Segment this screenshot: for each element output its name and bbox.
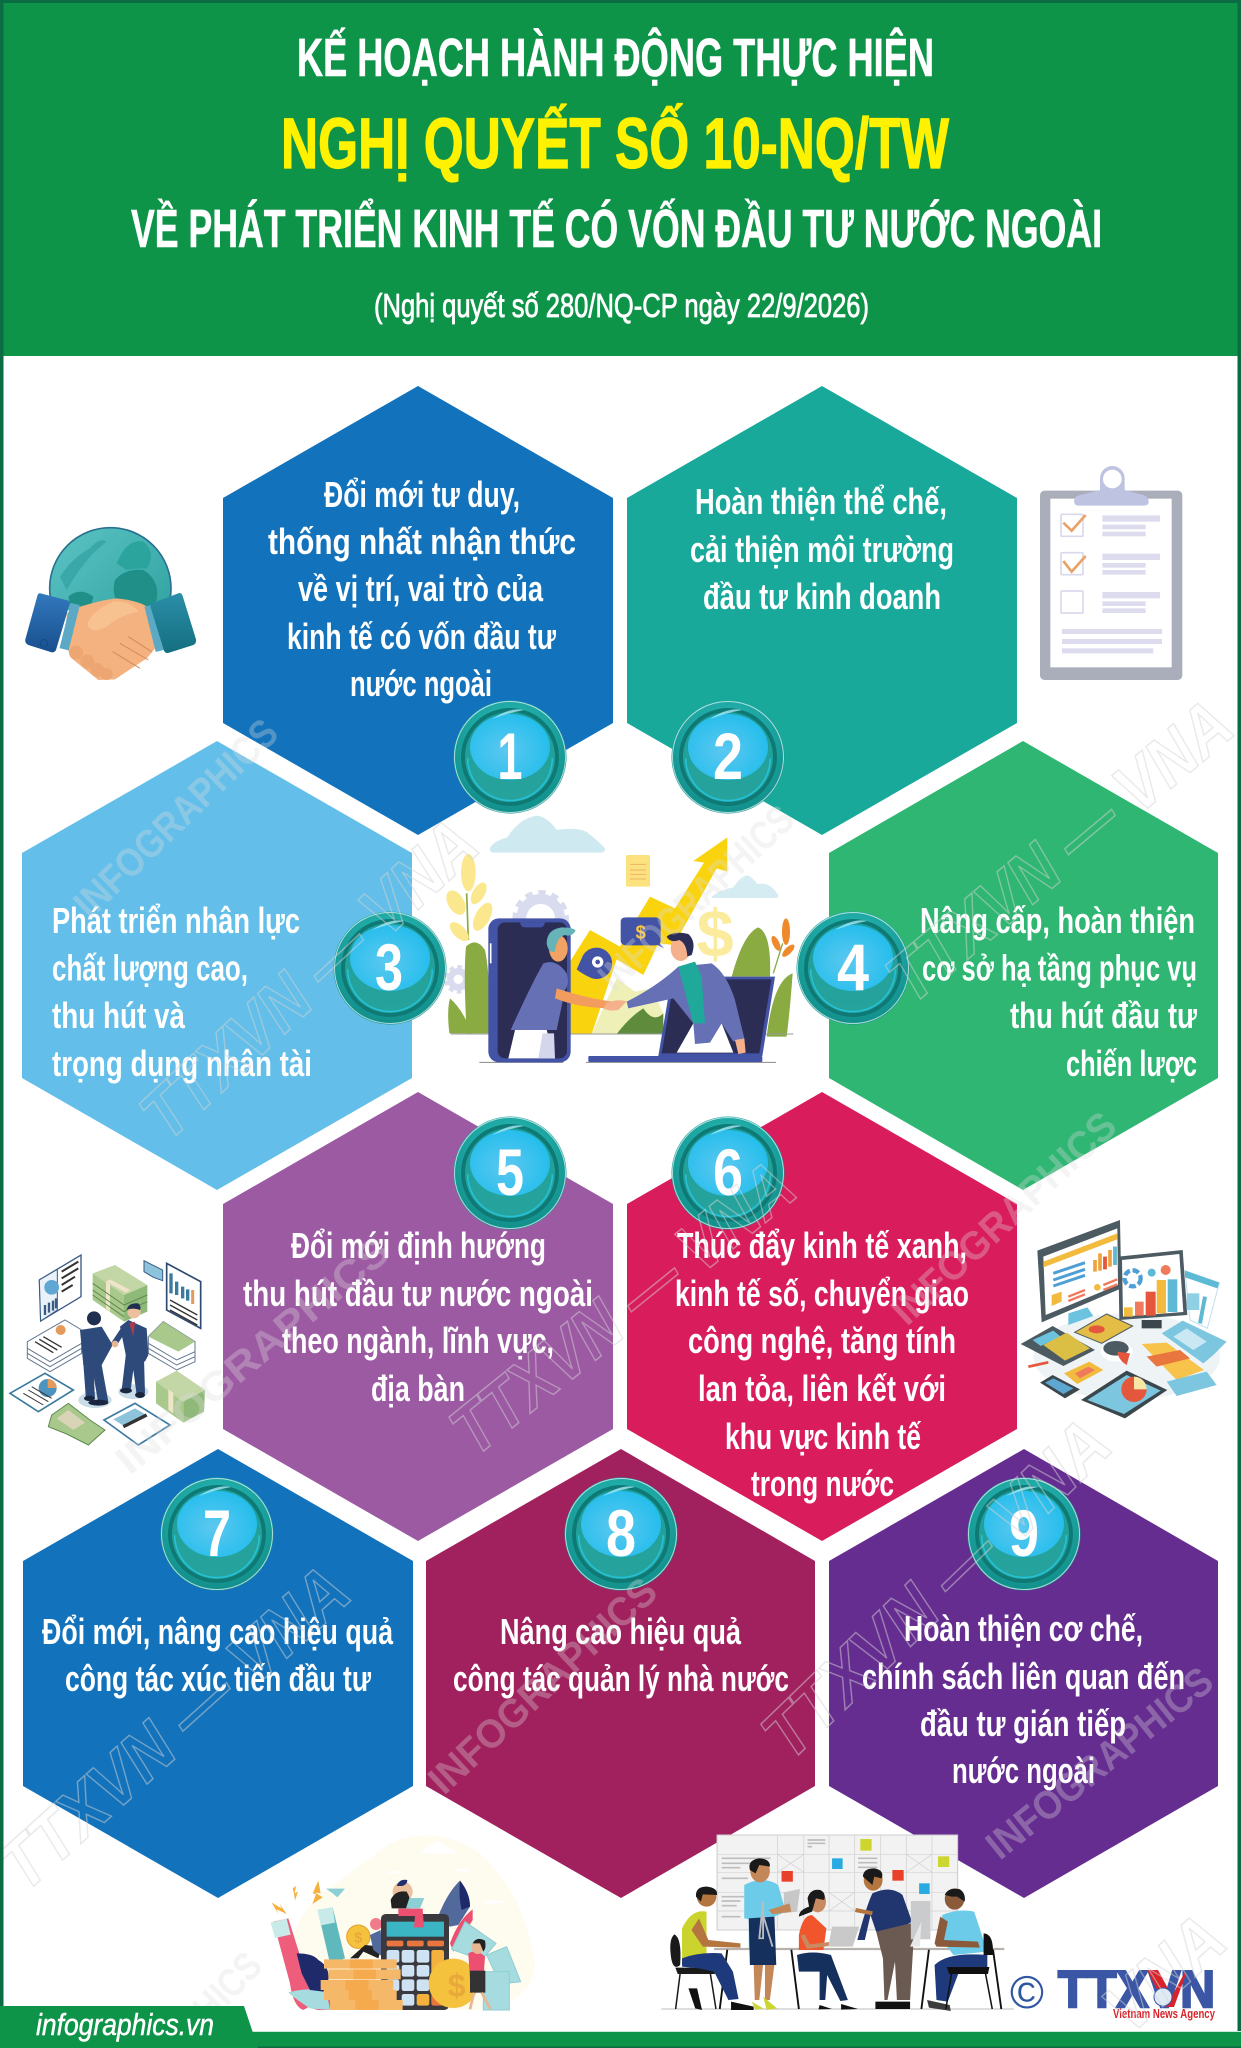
watermarks: INFOGRAPHICS (420, 1569, 666, 1803)
text: item 6: trong nước (751, 1463, 894, 1504)
panel: hexagon 2 (627, 386, 1017, 835)
text: item 5 (243, 1225, 593, 1409)
text: item 6 (675, 1225, 969, 1504)
text: item 9: Hoàn thiện cơ chế, (904, 1608, 1143, 1649)
watermarks: TTXVN — VNA (746, 1404, 1126, 1774)
badge 6 (672, 1116, 784, 1230)
text: item 7: Đổi mới, nâng cao hiệu quả (42, 1611, 394, 1652)
icon: clipboard checklist (1040, 466, 1182, 680)
text: item 8: công tác quản lý nhà nước (453, 1658, 789, 1699)
text: item 2: Hoàn thiện thể chế, (695, 481, 947, 522)
badge 2 (672, 700, 784, 814)
icon: team meeting in front of planning board (661, 1835, 1014, 2011)
text: item 2: cải thiện môi trường (690, 529, 954, 570)
watermarks: INFOGRAPHICS (66, 711, 287, 926)
text: item 3: chất lượng cao, (52, 948, 248, 988)
footer website: infographics.vn (36, 2007, 214, 2042)
text: item 3 (52, 900, 312, 1084)
icon: businessmen with money and reports (10, 1255, 205, 1445)
badge 1: 1 (498, 719, 522, 793)
text: item 1: Đổi mới tư duy, (324, 474, 520, 515)
watermarks (0, 685, 1241, 2047)
panel: hexagon 4 (829, 741, 1218, 1190)
text: item 9: nước ngoài (952, 1750, 1095, 1791)
icon: magnet, calculator and coins finance illustration: $ (354, 1931, 362, 1947)
icon: magnet, calculator and coins finance illustration (271, 1835, 535, 2010)
badge 4 (796, 912, 910, 1024)
icon: dashboards, calculator and documents (1021, 1220, 1227, 1418)
watermarks: INFOGRAPHICS (883, 1104, 1125, 1334)
badge 8: 8 (606, 1496, 636, 1570)
text: item 6: kinh tế số, chuyển giao (675, 1273, 969, 1314)
icon: central illustration, handshake through phone and laptop: $ (697, 898, 734, 972)
text: item 5: theo ngành, lĩnh vực, (282, 1320, 554, 1361)
badge 5 (454, 1116, 566, 1230)
badge 3 (334, 912, 446, 1024)
text: item 3: Phát triển nhân lực (52, 900, 300, 941)
panel: hexagon 7 (23, 1449, 413, 1898)
footer band (0, 2006, 1241, 2048)
badge 9 (968, 1478, 1080, 1590)
panel: hexagon 1 (223, 386, 613, 835)
badge 7 (160, 1478, 274, 1590)
badge 6: 6 (713, 1135, 743, 1209)
title line 2: resolution number: NGHỊ QUYẾT SỐ 10-NQ/TW (281, 104, 949, 184)
panel: hexagon 8 (426, 1449, 815, 1898)
icon: central illustration, handshake through phone and laptop: $ (635, 921, 646, 942)
badge 8 (564, 1478, 678, 1590)
watermarks: INFOGRAPHICS (108, 1229, 399, 1483)
text: item 4 (920, 900, 1198, 1084)
subtitle: (Nghị quyết số 280/NQ-CP ngày 22/9/2026) (374, 287, 869, 324)
text: item 7: công tác xúc tiến đầu tư (65, 1658, 372, 1699)
panel: hexagon 3 (22, 741, 412, 1190)
title line 1: KẾ HOẠCH HÀNH ĐỘNG THỰC HIỆN (297, 27, 934, 88)
badge 5: 5 (496, 1135, 524, 1209)
panel: hexagon 6 (627, 1092, 1017, 1541)
watermarks: INFOGRAPHICS (590, 797, 803, 1000)
text: item 3: trọng dụng nhân tài (52, 1043, 312, 1084)
icon: copyright symbol: © (1010, 1966, 1044, 2018)
text: item 1: kinh tế có vốn đầu tư (287, 616, 557, 657)
text: item 7 (42, 1611, 394, 1699)
text: item 5: thu hút đầu tư nước ngoài (243, 1273, 593, 1314)
watermarks: TTXVN — VNA (125, 804, 493, 1154)
logo: TTXVN: TTXVN (1058, 1961, 1215, 2019)
badge 9: 9 (1009, 1496, 1039, 1570)
text: item 6: lan tỏa, liên kết với (698, 1368, 946, 1409)
icon: globe with handshake (25, 528, 196, 680)
text: item 8: Nâng cao hiệu quả (500, 1611, 742, 1652)
text: item 9: đầu tư gián tiếp (920, 1703, 1126, 1744)
footer tab (0, 2006, 258, 2048)
watermarks: PHICS (170, 1944, 271, 2046)
text: item 3: thu hút và (52, 995, 186, 1036)
text: item 6: khu vực kinh tế (725, 1416, 922, 1457)
badge 2: 2 (713, 719, 743, 793)
badge 1 (454, 700, 566, 814)
badge 3: 3 (375, 930, 403, 1004)
text: item 2: đầu tư kinh doanh (703, 576, 941, 617)
watermarks: INFOGRAPHICS (978, 1659, 1222, 1868)
badge 4: 4 (837, 930, 869, 1004)
icon: central illustration, handshake through phone and laptop (442, 816, 796, 1062)
text: item 1: về vị trí, vai trò của (298, 568, 544, 609)
text: item 1: nước ngoài (350, 663, 492, 704)
text: item 8 (453, 1611, 789, 1699)
watermarks: TTXVN — VNA (435, 1146, 809, 1470)
text: item 2 (690, 481, 954, 617)
text: item 1: thống nhất nhận thức (268, 521, 576, 562)
icon: magnet, calculator and coins finance illustration: $ (448, 1968, 466, 2004)
text: item 9 (862, 1608, 1185, 1791)
panel: header band (0, 0, 1241, 356)
badge 7: 7 (203, 1496, 231, 1570)
panel: hexagon 9 (829, 1449, 1218, 1898)
text: item 6: Thúc đẩy kinh tế xanh, (677, 1225, 967, 1266)
panel: hexagon 5 (223, 1092, 613, 1541)
text: item 6: công nghệ, tăng tính (688, 1320, 956, 1361)
text: item 5: địa bàn (371, 1368, 465, 1409)
text: item 5: Đổi mới định hướng (291, 1225, 546, 1266)
text: item 1 (268, 474, 576, 704)
